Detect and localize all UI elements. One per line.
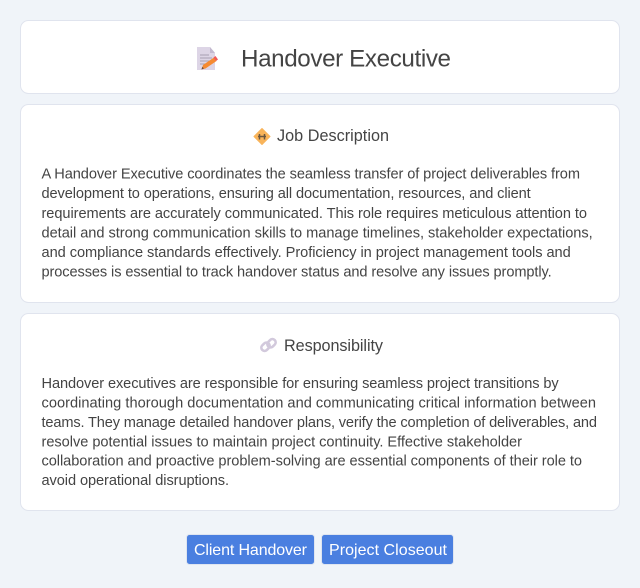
title: Handover Executive xyxy=(241,46,451,73)
icon: chain link xyxy=(260,338,277,352)
panel: title header xyxy=(20,20,620,94)
button: client handover: Client Handover xyxy=(194,542,308,559)
text block: job description: requirements are accurately communicated. This role requires meticulous attention to xyxy=(42,206,587,222)
text block: responsibility: avoid operational disruptions. xyxy=(42,473,229,489)
panel: responsibility xyxy=(20,314,620,510)
text block: responsibility: Handover executives are responsible for ensuring seamless project transitions by xyxy=(42,376,559,392)
button: project closeout: Project Closeout xyxy=(329,542,448,559)
text block: responsibility: collaboration and proactive problem-solving are essential components of their role to xyxy=(42,454,582,470)
text block: responsibility: coordinating thorough documentation and communicating critical information between xyxy=(42,395,596,411)
text block: job description: detail and strong communication skills to manage timelines, stakeholder expectations, xyxy=(42,225,593,241)
text block: responsibility xyxy=(42,376,597,489)
text block: job description xyxy=(42,167,593,280)
text block: job description: A Handover Executive coordinates the seamless transfer of project deliverables from xyxy=(42,167,580,183)
heading: responsibility: Responsibility xyxy=(284,337,384,355)
text block: responsibility: teams. They manage detailed handover plans, verify the completion of deliverables, and xyxy=(42,415,597,431)
icon: road sign xyxy=(254,128,270,144)
button: project closeout xyxy=(322,534,454,564)
heading: job description: Job Description xyxy=(277,127,389,145)
text block: job description: development to operations, ensuring all documentation, resources, and client xyxy=(42,186,531,202)
text block: job description: and compliance standards effectively. Proficiency in project management tools and xyxy=(42,245,571,261)
panel: job description xyxy=(20,104,620,302)
text block: responsibility: resolve potential issues to maintain project continuity. Effective stakeholder xyxy=(42,434,522,450)
icon: document with pencil xyxy=(197,47,218,70)
text block: job description: processes is essential to track handover status and resolve any issues promptly. xyxy=(42,264,552,280)
button: client handover xyxy=(186,534,314,564)
